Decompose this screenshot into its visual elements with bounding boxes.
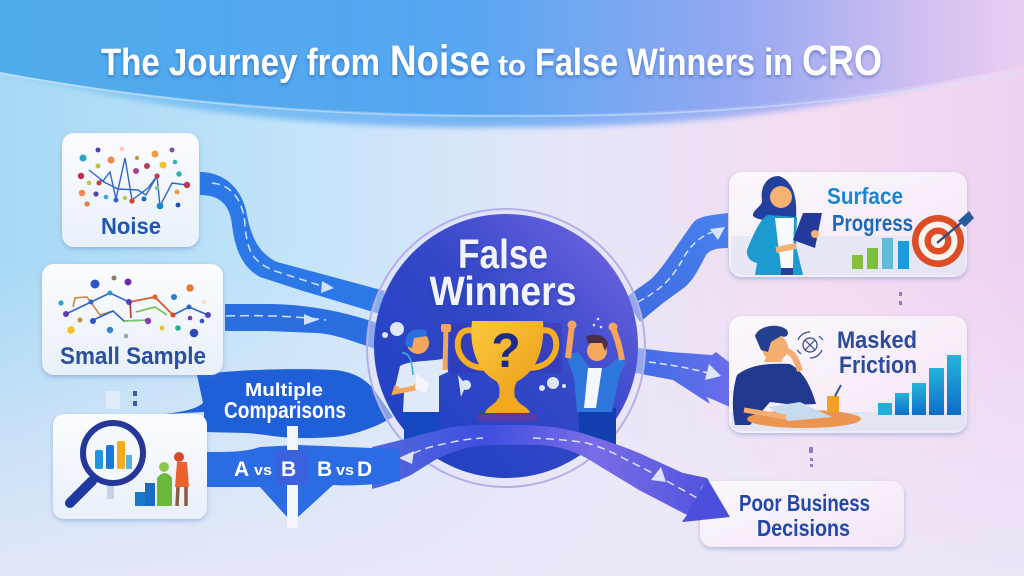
- label: masked friction: Masked: [837, 327, 917, 354]
- connector dots right: [809, 292, 902, 467]
- icon: magnifying glass with bars: [70, 423, 143, 503]
- panel: noise: [62, 133, 199, 247]
- arrow: false winners to surface progress: [625, 213, 728, 322]
- label: multiple comparisons: Multiple: [245, 379, 323, 400]
- panel: poor business decisions: [682, 478, 904, 547]
- label: masked friction: Friction: [839, 352, 917, 379]
- chart: progress bars: [852, 238, 909, 269]
- label: A vs B: vs: [254, 463, 272, 479]
- false winners heading: False: [458, 231, 548, 277]
- label: small sample: Small Sample: [60, 343, 206, 370]
- title: [101, 37, 882, 85]
- title: CRO: [802, 37, 882, 85]
- label: surface progress: Progress: [832, 210, 913, 236]
- label: B vs D: B: [317, 458, 332, 481]
- panel: surface progress: [729, 172, 974, 277]
- label: surface progress: Surface: [827, 183, 903, 209]
- panel: masked friction: [729, 316, 967, 433]
- title: to: [498, 50, 526, 82]
- label: A vs B: [234, 458, 296, 481]
- card floor strip: [731, 412, 965, 431]
- label: multiple comparisons: Comparisons: [224, 397, 346, 423]
- label: A vs B: B: [281, 458, 296, 481]
- label: poor business decisions: [739, 490, 870, 541]
- label: B vs D: vs: [336, 463, 354, 479]
- icon: trophy with question mark: [450, 321, 562, 421]
- arrow: false winners to masked friction: [630, 347, 730, 407]
- icon: trophy with question mark: ?: [491, 325, 521, 378]
- central circle: [367, 209, 645, 487]
- chart: noisy scatter line: [78, 147, 190, 209]
- figure: left person with paper: [394, 324, 451, 448]
- label: surface progress: [827, 183, 913, 236]
- chart: rising bars: [878, 355, 961, 415]
- title: False Winners in: [535, 42, 793, 84]
- label: B vs D: D: [357, 458, 372, 481]
- label: multiple comparisons: [224, 379, 346, 423]
- label: poor business decisions: Decisions: [757, 515, 850, 541]
- figure: right person cheering: [566, 320, 626, 448]
- chart: sparse line plot: [58, 276, 211, 338]
- card floor strip: [731, 236, 965, 275]
- decorative splashes: [382, 318, 602, 397]
- ribbon: multiple comparisons: [165, 369, 393, 438]
- ribbon: comparison pairs: [207, 426, 400, 528]
- vertical marker: [287, 426, 298, 528]
- icon: man reading at table: [733, 326, 861, 428]
- icon: woman with tablet: [747, 176, 822, 275]
- connector dots: [106, 391, 137, 409]
- panel: magnifier data: [53, 414, 207, 519]
- label: poor business decisions: Poor Business: [739, 490, 870, 516]
- title: Noise: [390, 37, 490, 85]
- arrow: noise to false winners: [200, 172, 385, 314]
- label: B vs D: [317, 458, 372, 481]
- title: The Journey from: [101, 42, 380, 84]
- arrow: false winners to poor business decisions: [372, 425, 730, 522]
- label: noise: Noise: [101, 213, 161, 239]
- icon: bars and two people: [135, 452, 189, 506]
- arrow: small sample to false winners: [225, 304, 380, 350]
- label: masked friction: [837, 327, 917, 379]
- icon: friction swirl: [797, 332, 823, 358]
- label: A vs B: A: [234, 458, 249, 481]
- arrow tip over panel: [682, 478, 730, 522]
- panel: small sample: [42, 264, 223, 375]
- header banner: [0, 0, 1024, 127]
- false winners heading: [430, 231, 576, 314]
- box: B: [275, 450, 307, 485]
- icon: target with arrow: [912, 211, 974, 267]
- false winners heading: Winners: [430, 268, 576, 314]
